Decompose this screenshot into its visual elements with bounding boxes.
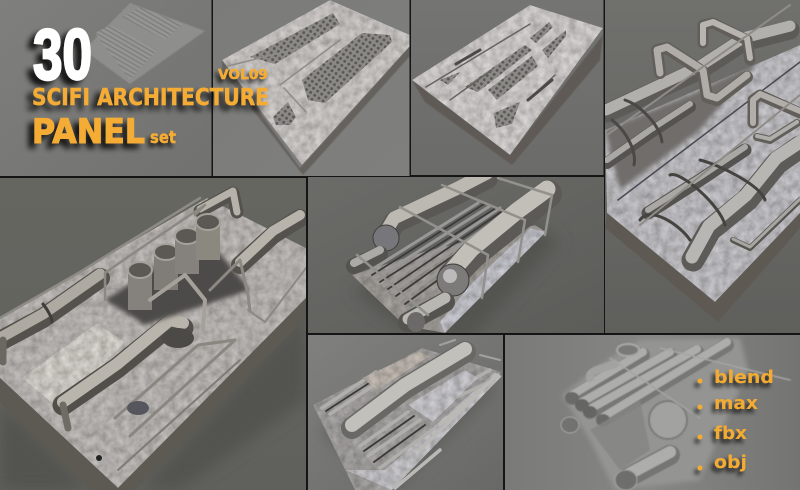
title: panel: PANEL xyxy=(32,112,145,152)
panel: slotted mesh plate xyxy=(411,0,604,176)
ghost pipes xyxy=(561,342,790,490)
pipe: center xyxy=(352,349,465,428)
pipe: top right xyxy=(200,191,300,265)
panel: hexagon mesh plate xyxy=(213,0,410,177)
pipe: center xyxy=(63,320,194,428)
title: set: set xyxy=(150,128,176,148)
plate: lower xyxy=(408,370,478,422)
icon: recessed panel xyxy=(22,323,125,410)
icon: upper slat vent xyxy=(122,7,180,38)
pipe: back elbow xyxy=(354,173,487,266)
icon: mesh slots xyxy=(440,22,566,128)
icon: upper mesh grille xyxy=(250,13,340,64)
panel: flat slatted plate behind title xyxy=(0,0,212,177)
plate base xyxy=(352,225,546,333)
plate top xyxy=(0,198,306,488)
icon: triangular mesh grille xyxy=(273,102,296,125)
plate: upper xyxy=(362,352,430,390)
rails xyxy=(96,205,306,470)
plate side faces xyxy=(0,298,306,490)
pipe group: upper xyxy=(606,5,790,165)
format: fbx: fbx xyxy=(714,423,747,444)
panel: rod bundle with frames xyxy=(308,173,604,340)
panel: plated pipe block xyxy=(308,335,504,490)
ghost model silhouette xyxy=(562,338,748,490)
pipe: front elbow xyxy=(407,189,548,332)
plate body xyxy=(605,45,800,322)
panel: ghosted pipes and formats xyxy=(505,335,800,490)
panel: close-up pipes xyxy=(605,0,800,334)
format: max: max xyxy=(714,393,758,414)
pipe group: lower xyxy=(640,94,800,260)
rods xyxy=(322,340,500,468)
list: file formats xyxy=(698,367,774,473)
rods xyxy=(366,202,505,308)
title: 30: 30 xyxy=(33,16,92,95)
format: obj: obj xyxy=(714,452,747,473)
pipe: left horizontal xyxy=(0,198,200,362)
format: blend: blend xyxy=(714,367,774,388)
title: scifi architecture: SCIFI ARCHITECTURE xyxy=(32,85,269,111)
icon: lower mesh grille xyxy=(302,33,392,103)
icon: lower slat vent xyxy=(95,25,157,80)
block silhouette xyxy=(313,348,502,490)
label: volume: VOL09 xyxy=(218,67,268,83)
frames xyxy=(357,178,552,315)
panel: valve assembly plate xyxy=(0,178,307,490)
icon: valve cluster xyxy=(105,214,250,325)
